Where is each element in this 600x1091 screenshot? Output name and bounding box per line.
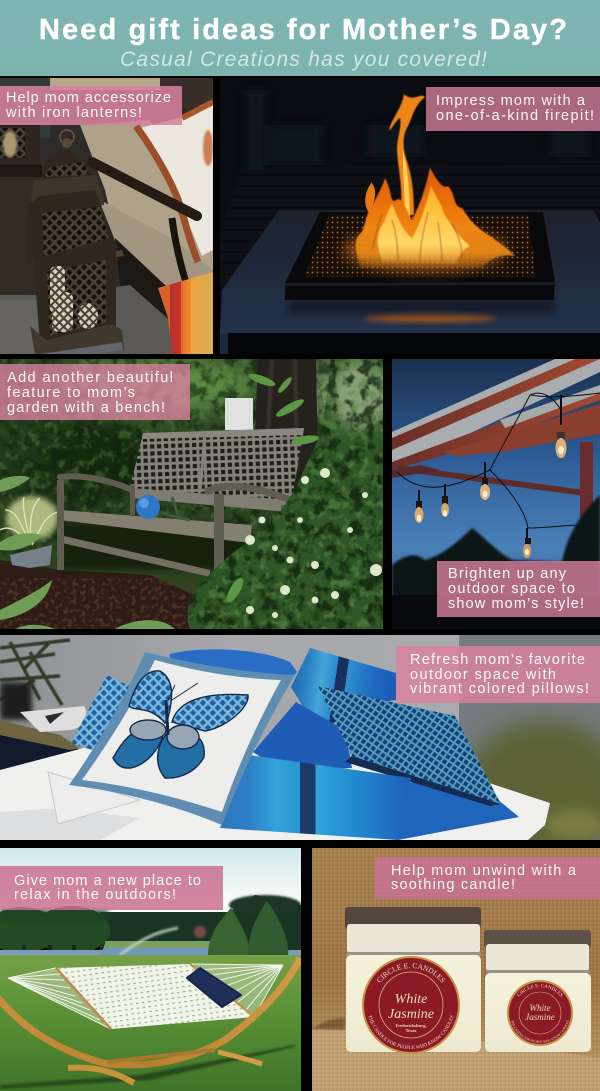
dark seat: [0, 727, 80, 772]
grass plant and pot: [6, 496, 58, 540]
back urn and lantern: [0, 125, 42, 290]
lawn: [0, 955, 301, 1091]
label: garden bench: garden with a bench!: [7, 400, 165, 416]
striped pillow: [158, 272, 213, 354]
diamond pattern pillow: [318, 686, 501, 804]
mulch ground: [0, 560, 205, 629]
label: pillows: outdoor space with: [410, 667, 556, 683]
small candle jar: Jasmine: [525, 1012, 555, 1022]
panel: firepit: [220, 78, 600, 354]
subtitle: Casual Creations has you covered!: [120, 48, 487, 71]
label: string lights: outdoor space to: [448, 581, 575, 597]
small candle jar: [484, 930, 591, 1052]
tree line: [100, 895, 301, 950]
blue lower-right pillow: [320, 765, 519, 840]
header banner: [0, 0, 600, 76]
glass burner: [304, 215, 536, 277]
conifers: [208, 908, 250, 955]
flowering shrub: [187, 359, 383, 629]
solid blue pillow: [253, 702, 352, 770]
butterfly: [113, 671, 248, 778]
panel: candles: [312, 848, 600, 1091]
large candle jar: CIRCLE E. CANDLES: [377, 963, 446, 982]
panel: string lights: [392, 359, 600, 629]
top blue pillow: [170, 649, 297, 690]
foreground leaves: [0, 476, 175, 629]
label: string lights: [437, 561, 600, 617]
shadow: [0, 1045, 295, 1089]
chair cushion: [80, 120, 213, 310]
hammock: [8, 964, 283, 1029]
roof beams: [392, 359, 600, 557]
label: pillows: Refresh mom’s favorite: [410, 652, 585, 668]
label: garden bench: [0, 364, 190, 420]
large candle jar: [345, 907, 481, 1054]
wooden stand: [0, 958, 300, 1083]
table top: [220, 210, 600, 333]
pond: [0, 950, 301, 956]
panel: garden bench: [0, 359, 383, 629]
label: iron lanterns: Help mom accessorize: [6, 90, 171, 106]
label: garden bench: Add another beautiful: [7, 370, 173, 386]
label: candles: soothing candle!: [391, 877, 515, 893]
label: firepit: one-of-a-kind firepit!: [436, 108, 594, 124]
tree trunk: [255, 359, 318, 500]
table reflection: [364, 314, 496, 322]
small lattice pillow: [71, 675, 138, 750]
label: pillows: vibrant colored pillows!: [410, 681, 589, 697]
hydrangea: [136, 495, 160, 519]
label: hammock: Give mom a new place to: [14, 873, 201, 889]
ornamental grass: [465, 720, 600, 850]
front lantern: [22, 130, 124, 362]
label: candles: [375, 857, 600, 899]
striped upper pillow: [291, 648, 396, 735]
small candle jar: CIRCLE E. CANDLES: [517, 984, 563, 996]
large candle jar: Texas: [406, 1028, 417, 1033]
white pillow: [140, 102, 213, 256]
tree silhouettes: [392, 495, 600, 629]
small candle jar: White: [530, 1003, 550, 1013]
striped lower pillow: [220, 755, 411, 840]
label: pillows: [396, 646, 600, 703]
dark plant: [0, 640, 70, 705]
label: firepit: Impress mom with a: [436, 93, 586, 109]
title: Need gift ideas for Mother’s Day?: [39, 14, 567, 46]
flames: [356, 94, 515, 268]
navy pillow: [187, 968, 241, 1007]
large candle jar: White: [395, 992, 427, 1007]
label: string lights: show mom’s style!: [448, 596, 584, 612]
label: firepit: [426, 87, 600, 131]
small candle jar: THE CANDLE FOR PEOPLE WHO KNOW CANDLES: [511, 1020, 569, 1043]
bulbs: [414, 395, 566, 558]
panel: pillows: [0, 635, 600, 840]
burner frame: [285, 212, 555, 300]
butterfly pillow: [69, 652, 295, 825]
bench: [57, 428, 304, 612]
label: iron lanterns: [0, 86, 182, 125]
panel: iron lanterns: [0, 78, 213, 354]
large candle jar: Fredericksburg,: [395, 1023, 427, 1028]
large candle jar: THE CANDLE FOR PEOPLE WHO KNOW CANDLES: [368, 1014, 454, 1049]
label: string lights: Brighten up any: [448, 566, 567, 582]
label: hammock: relax in the outdoors!: [14, 887, 176, 903]
white mirror fixture: [20, 706, 86, 732]
panel: hammock: [0, 848, 301, 1091]
white lounger: [0, 740, 550, 840]
house shutter: [225, 398, 253, 430]
label: iron lanterns: with iron lanterns!: [5, 105, 142, 121]
label: hammock: [0, 866, 223, 910]
label: garden bench: feature to mom’s: [7, 385, 135, 401]
light wires: [397, 393, 600, 528]
label: candles: Help mom unwind with a: [391, 863, 577, 879]
large candle jar: Jasmine: [388, 1007, 434, 1022]
